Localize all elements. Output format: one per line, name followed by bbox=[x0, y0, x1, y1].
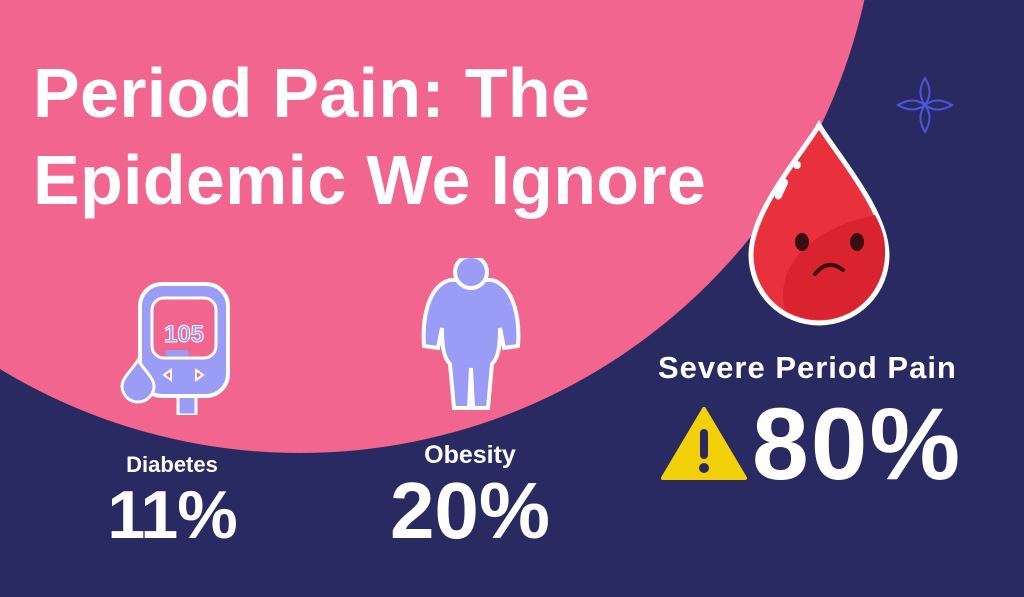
text: 11% bbox=[107, 477, 237, 553]
text: 80% bbox=[752, 387, 962, 501]
stat: diabetes: Diabetes bbox=[126, 452, 218, 477]
title bbox=[33, 54, 706, 219]
icon: blood drop bbox=[748, 120, 890, 326]
icon: warning bbox=[661, 406, 748, 480]
icon: glucometer: 105 bbox=[164, 321, 204, 348]
icon: sparkle bbox=[896, 76, 954, 134]
title: Period Pain: The bbox=[33, 54, 590, 132]
icon: obesity figure bbox=[422, 258, 520, 410]
icon: glucometer bbox=[120, 282, 230, 415]
stat: obesity: Obesity bbox=[424, 441, 516, 469]
stat: severe period pain: Severe Period Pain bbox=[658, 350, 957, 385]
title: Epidemic We Ignore bbox=[33, 141, 706, 219]
text: 20% bbox=[390, 466, 550, 555]
